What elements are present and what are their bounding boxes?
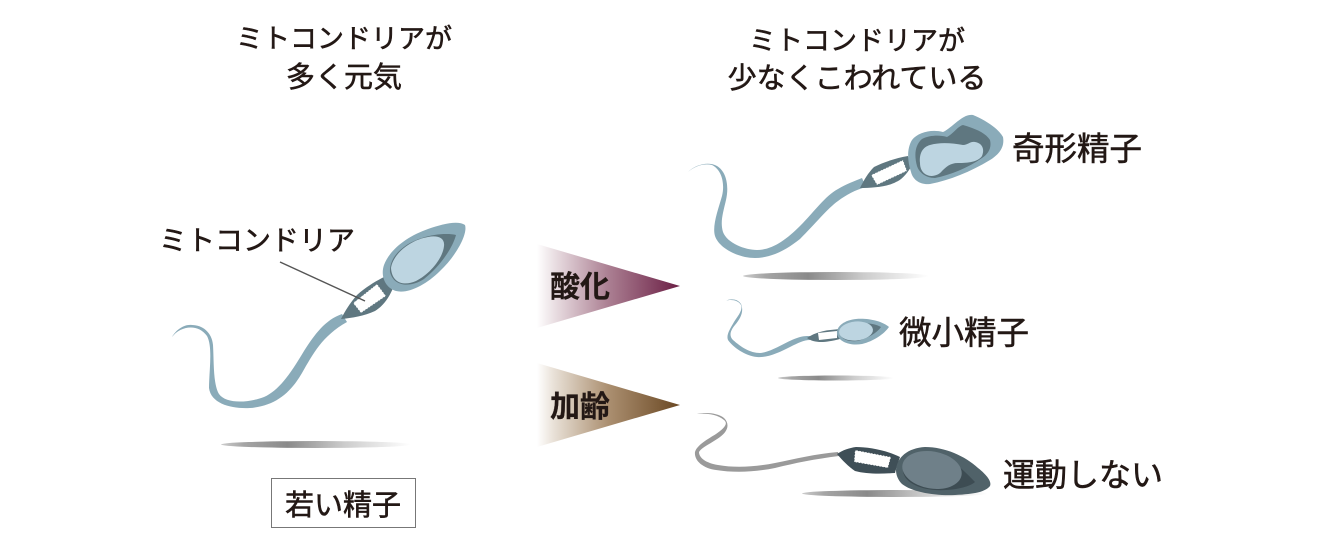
arrow: aging: 加齢 <box>550 391 610 424</box>
heading: many healthy mitochondria: ミトコンドリアが <box>236 24 452 54</box>
young sperm illustration <box>172 223 465 448</box>
pointer line to mitochondria <box>280 262 365 301</box>
shadow <box>743 272 929 280</box>
label: teratozoospermia: 奇形精子 <box>1012 131 1142 167</box>
microsperm illustration <box>725 299 894 380</box>
teratozoospermia sperm illustration <box>688 115 1003 280</box>
head <box>908 115 1003 184</box>
tail <box>688 164 866 258</box>
midpiece <box>837 447 900 474</box>
heading: many healthy mitochondria <box>236 24 452 94</box>
heading: few damaged mitochondria: ミトコンドリアが <box>749 26 965 56</box>
arrow: oxidation <box>537 244 680 328</box>
arrow: aging <box>537 363 680 447</box>
shadow <box>221 441 411 448</box>
heading: many healthy mitochondria: 多く元気 <box>286 61 402 94</box>
label box: young sperm <box>272 478 416 528</box>
heading: few damaged mitochondria: 少なくこわれている <box>728 62 986 95</box>
label: immotile: 運動しない <box>1003 457 1163 493</box>
shadow <box>802 490 988 497</box>
tail <box>725 299 810 357</box>
tail <box>172 314 347 408</box>
immotile sperm illustration <box>695 413 990 497</box>
head <box>837 319 889 345</box>
tail <box>695 413 839 472</box>
label: microsperm: 微小精子 <box>899 315 1029 351</box>
label box: young sperm: 若い精子 <box>285 489 401 522</box>
shadow <box>778 376 894 380</box>
midpiece <box>807 329 840 342</box>
heading: few damaged mitochondria <box>728 26 986 95</box>
arrow: oxidation: 酸化 <box>550 271 610 304</box>
head <box>896 447 990 495</box>
head <box>383 223 465 292</box>
midpiece <box>341 277 393 319</box>
midpiece <box>860 156 911 188</box>
label: mitochondria: ミトコンドリア <box>159 225 355 256</box>
